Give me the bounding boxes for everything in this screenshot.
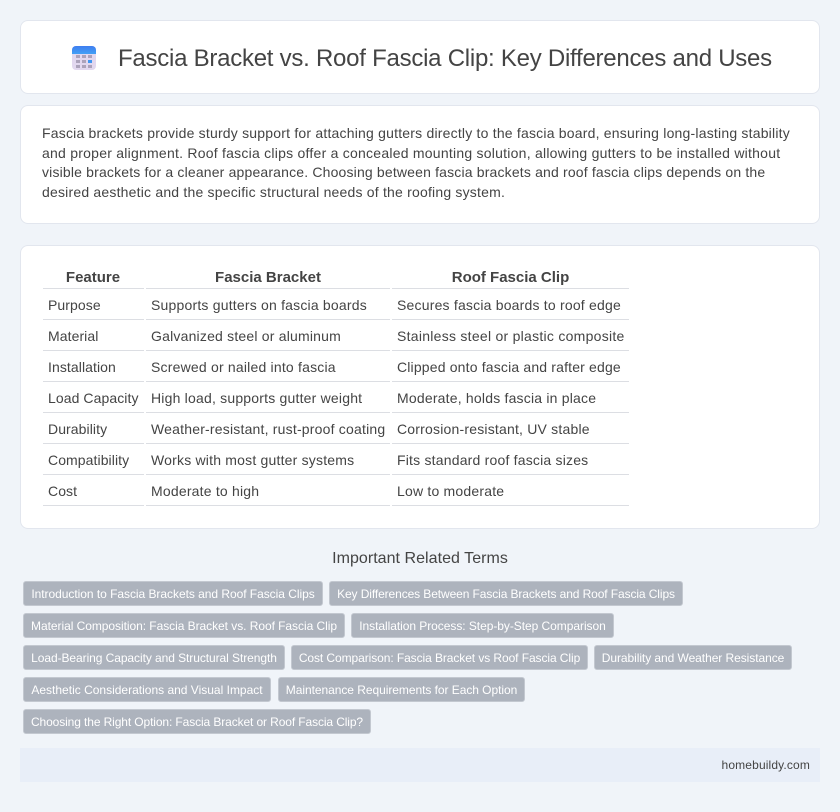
row: compatibility: Works with most gutter systems xyxy=(151,452,354,468)
row: material: Stainless steel or plastic composite xyxy=(397,328,625,344)
table header: Feature xyxy=(66,269,120,286)
row: purpose: Supports gutters on fascia boards xyxy=(151,297,367,313)
tag: Installation Process: Step-by-Step Comparison xyxy=(359,619,606,633)
row: durability: Corrosion-resistant, UV stable xyxy=(397,421,590,437)
row: cost: Low to moderate xyxy=(397,483,504,499)
row: installation: Screwed or nailed into fascia xyxy=(151,359,336,375)
tag xyxy=(594,645,792,670)
row: compatibility: Fits standard roof fascia sizes xyxy=(397,452,588,468)
row: load capacity: High load, supports gutter weight xyxy=(151,390,362,406)
tag: Material Composition: Fascia Bracket vs. Roof Fascia Clip xyxy=(31,619,337,633)
tag: Cost Comparison: Fascia Bracket vs Roof Fascia Clip xyxy=(299,651,580,665)
intro text xyxy=(42,125,790,200)
tag: Maintenance Requirements for Each Option xyxy=(286,683,517,697)
tag xyxy=(291,645,588,670)
row: load capacity xyxy=(48,390,596,406)
row: load capacity: Moderate, holds fascia in place xyxy=(397,390,596,406)
tag xyxy=(351,613,614,638)
footer source text: homebuildy.com xyxy=(722,758,810,772)
footer xyxy=(20,748,820,782)
tag: Key Differences Between Fascia Brackets and Roof Fascia Clips xyxy=(337,587,675,601)
intro text: visible brackets for a cleaner appearance. Choosing between fascia brackets and roof fascia clips depends on the xyxy=(42,164,765,180)
panel: intro xyxy=(20,105,820,224)
heading: related terms: Important Related Terms xyxy=(332,550,508,567)
tag xyxy=(23,581,323,606)
row: installation: Clipped onto fascia and rafter edge xyxy=(397,359,621,375)
row: compatibility: Compatibility xyxy=(48,452,129,468)
row: load capacity: Load Capacity xyxy=(48,390,139,406)
title: Fascia Bracket vs. Roof Fascia Clip: Key Differences and Uses xyxy=(118,45,772,72)
row: material: Material xyxy=(48,328,98,344)
tag xyxy=(23,709,371,734)
tag: Choosing the Right Option: Fascia Bracket or Roof Fascia Clip? xyxy=(31,715,363,729)
tag xyxy=(329,581,683,606)
intro text: and proper alignment. Roof fascia clips offer a concealed mounting solution, allowing gutters to be installed without xyxy=(42,144,780,160)
row: durability: Durability xyxy=(48,421,107,437)
row: purpose xyxy=(48,297,621,313)
intro text: desired aesthetic and the specific structural needs of the roofing system. xyxy=(42,184,505,200)
row: cost: Cost xyxy=(48,483,77,499)
icon: calendar xyxy=(72,46,96,70)
tag: Load-Bearing Capacity and Structural Strength xyxy=(31,651,277,665)
row: cost: Moderate to high xyxy=(151,483,259,499)
row: cost xyxy=(48,483,504,499)
tag xyxy=(23,677,271,702)
panel: header xyxy=(20,20,820,94)
row: purpose: Secures fascia boards to roof edge xyxy=(397,297,621,313)
row: durability: Weather-resistant, rust-proof coating xyxy=(151,421,385,437)
row: installation: Installation xyxy=(48,359,116,375)
row: material: Galvanized steel or aluminum xyxy=(151,328,341,344)
tag: Aesthetic Considerations and Visual Impact xyxy=(31,683,263,697)
table header: Fascia Bracket xyxy=(215,269,321,286)
tag: Introduction to Fascia Brackets and Roof Fascia Clips xyxy=(31,587,315,601)
tag xyxy=(23,613,345,638)
tag xyxy=(278,677,525,702)
row: compatibility xyxy=(48,452,588,468)
tag xyxy=(23,645,285,670)
table header xyxy=(66,269,569,286)
row: purpose: Purpose xyxy=(48,297,101,313)
panel: comparison table xyxy=(20,245,820,529)
table header: Roof Fascia Clip xyxy=(452,269,569,286)
tag: Durability and Weather Resistance xyxy=(602,651,784,665)
related terms tags xyxy=(23,581,792,734)
row: installation xyxy=(48,359,621,375)
intro text: Fascia brackets provide sturdy support for attaching gutters directly to the fascia board, ensuring long-lasting stability xyxy=(42,125,790,141)
row: material xyxy=(48,328,625,344)
row: durability xyxy=(48,421,590,437)
